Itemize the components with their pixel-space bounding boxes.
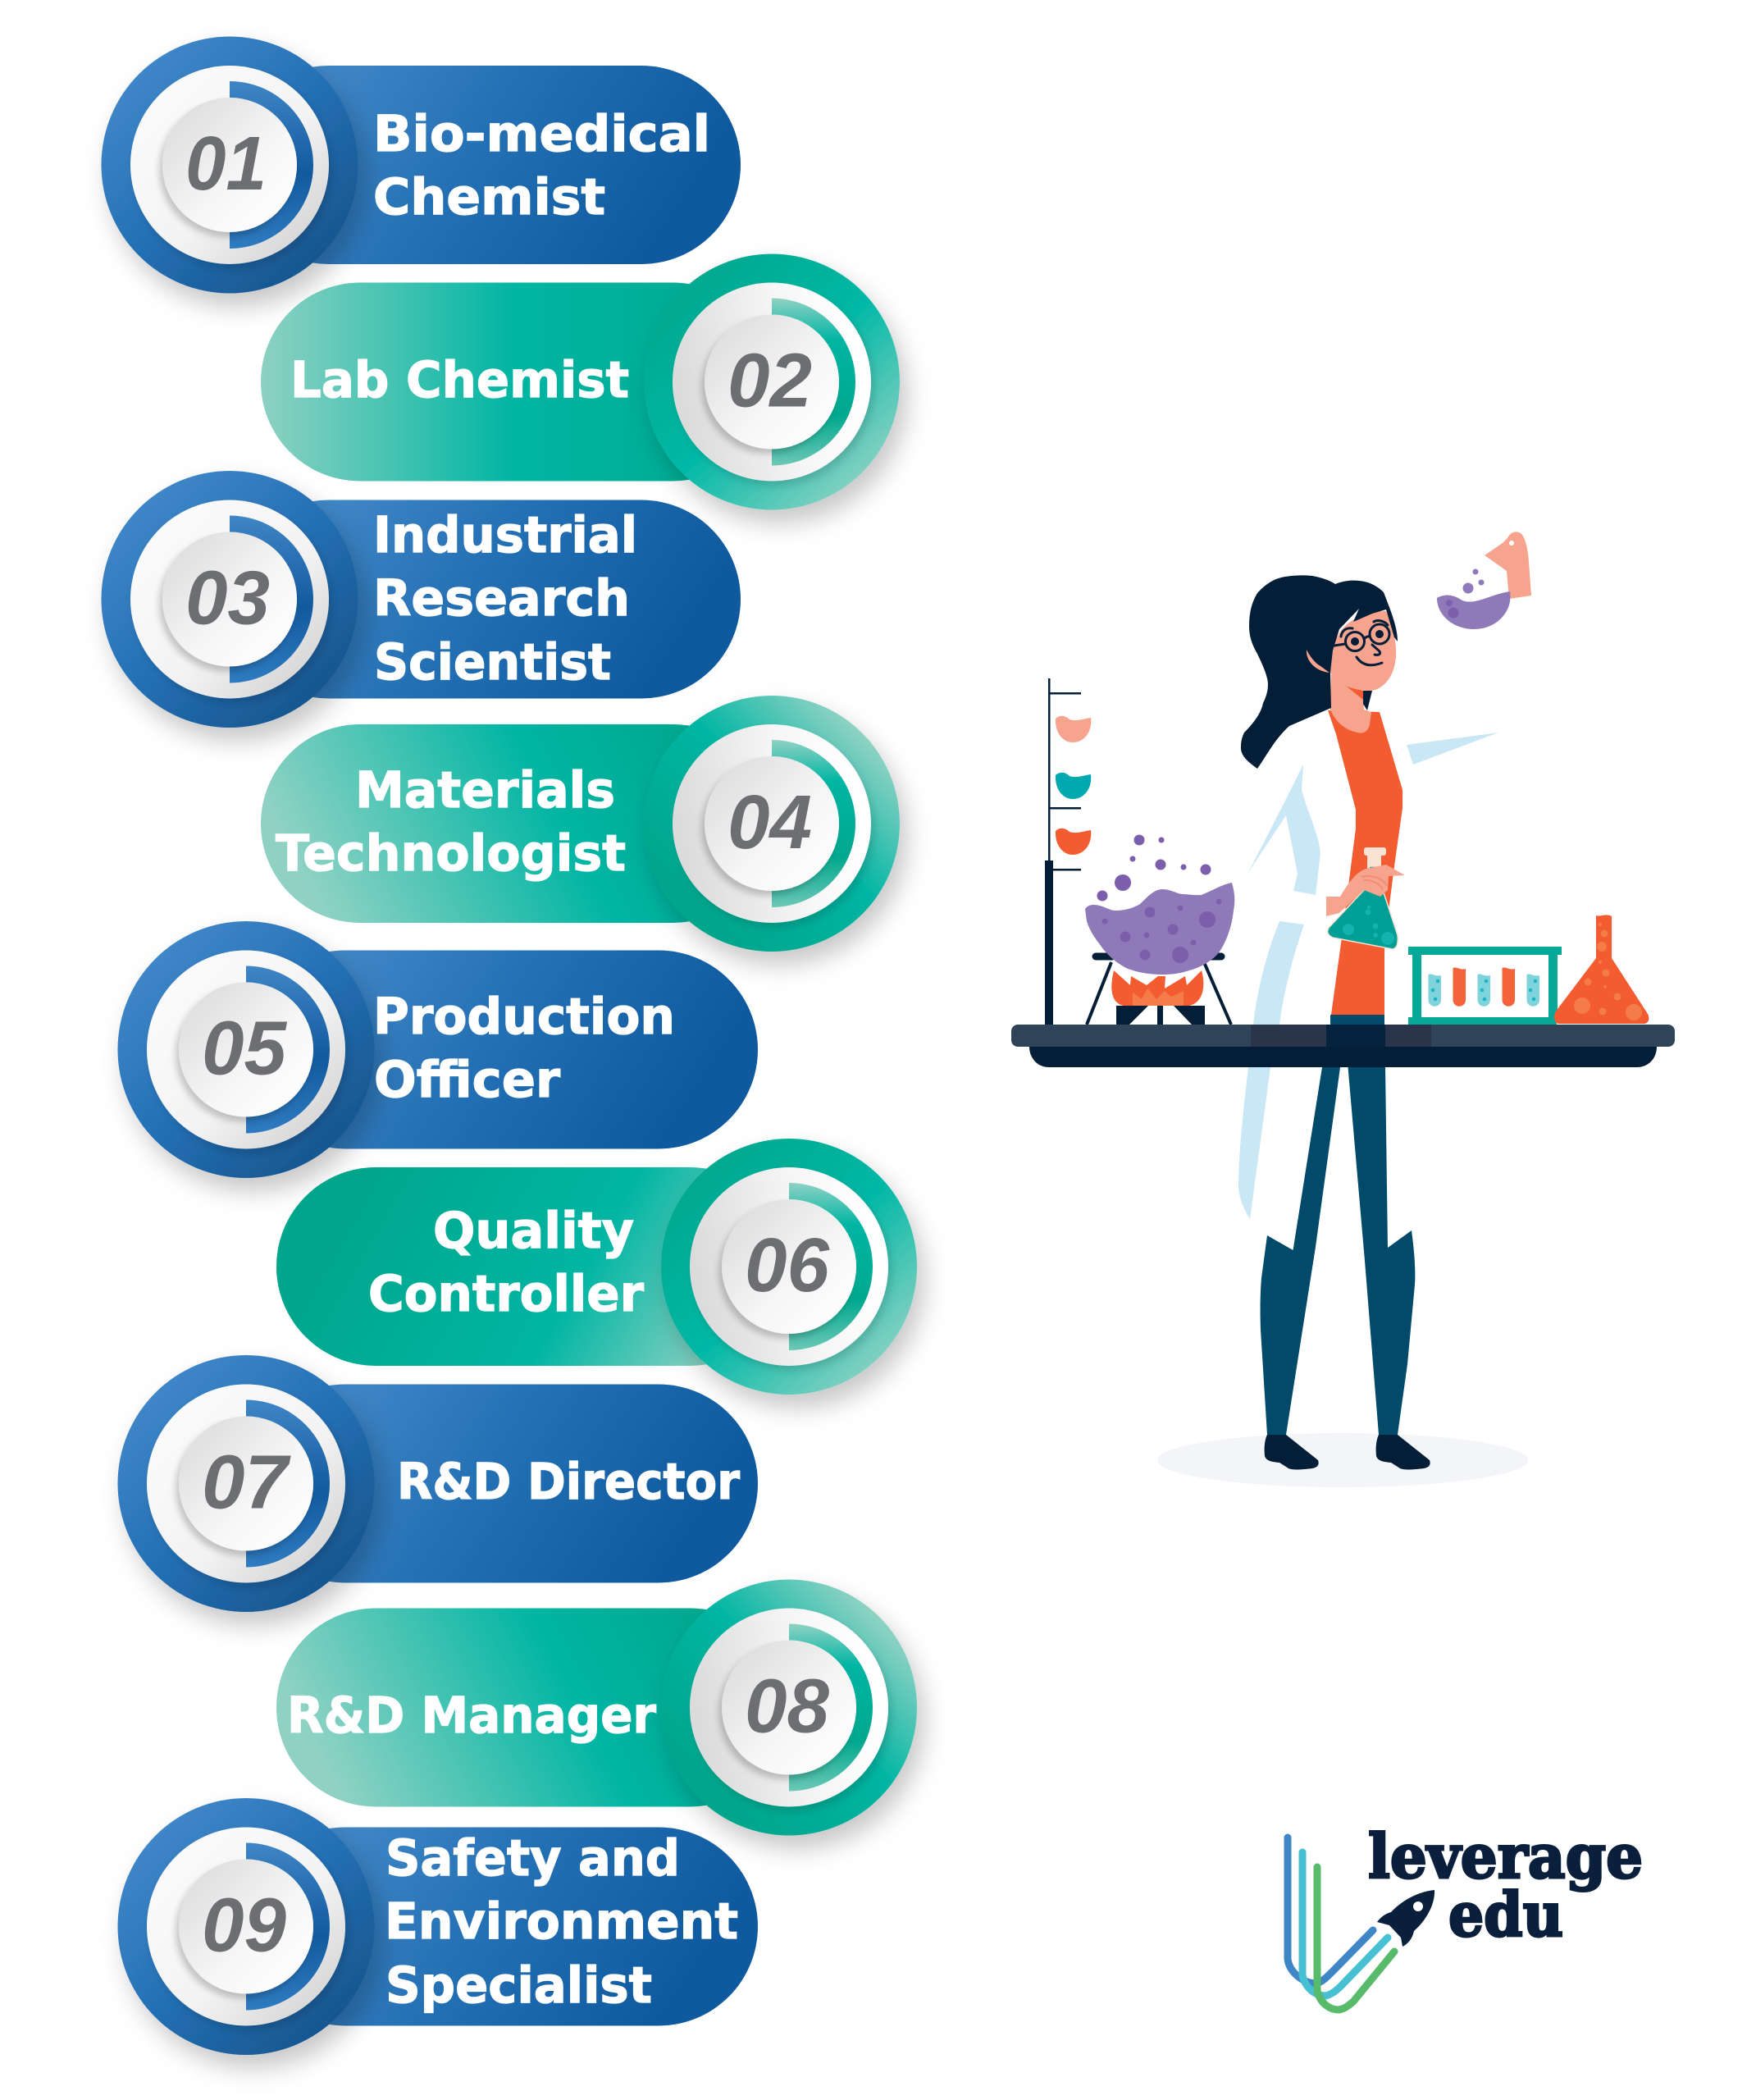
lab table xyxy=(1011,1025,1675,1067)
badge 06: 06 xyxy=(745,1222,830,1308)
pill 06 xyxy=(276,1167,789,1366)
badge 04: 04 xyxy=(727,779,812,865)
badge 08 xyxy=(661,1580,917,1836)
neck xyxy=(1330,674,1371,733)
label 04: Materials xyxy=(355,761,615,819)
badge 01 xyxy=(102,36,358,294)
label 02: Lab Chemist xyxy=(290,351,629,409)
label 09 xyxy=(385,1829,738,2015)
row 08: R&D Manager xyxy=(276,1580,917,1836)
logo: leverage edu xyxy=(1288,1822,1643,2010)
row 06: Quality Controller xyxy=(276,1139,917,1395)
flame xyxy=(1111,970,1203,1006)
label 06 xyxy=(368,1202,644,1323)
row 09: Safety and Environment Specialist xyxy=(118,1798,758,2055)
badge 09: 09 xyxy=(202,1882,286,1967)
shoes xyxy=(1265,1435,1430,1470)
label 01 xyxy=(373,105,710,226)
neck shadow xyxy=(1333,675,1363,700)
coat stripes xyxy=(1238,733,1498,1219)
label 05: Production xyxy=(373,988,675,1046)
label 09: Specialist xyxy=(385,1956,652,2015)
floor shadow xyxy=(1157,1433,1528,1487)
ear xyxy=(1307,650,1330,673)
label 04: Technologist xyxy=(276,824,626,883)
boiling pot xyxy=(1085,835,1234,975)
badge 05 xyxy=(118,921,374,1178)
logo rocket xyxy=(1377,1890,1434,1947)
pill 09 xyxy=(246,1828,758,2026)
hair xyxy=(1241,575,1398,769)
row 01: Bio-medical Chemist xyxy=(102,36,741,294)
label 09: Environment xyxy=(385,1892,738,1951)
pill 08 xyxy=(276,1608,789,1806)
label 08: R&D Manager xyxy=(287,1687,656,1745)
logo wordmark xyxy=(1368,1822,1643,1951)
row 05: Production Officer xyxy=(118,921,758,1178)
burette stand xyxy=(1045,678,1091,1025)
illustration: scientist at lab table xyxy=(1011,532,1675,1487)
badge 09 xyxy=(118,1798,374,2055)
badge 01: 01 xyxy=(185,121,267,206)
logo mark: three stripes xyxy=(1288,1838,1394,2010)
badge 08: 08 xyxy=(745,1664,829,1749)
badge 03: 03 xyxy=(185,555,270,640)
floating flask xyxy=(1437,532,1531,629)
torso xyxy=(1328,710,1403,1015)
test tube rack xyxy=(1408,947,1562,1025)
label 07: R&D Director xyxy=(397,1453,740,1511)
pill 02 xyxy=(261,282,772,481)
row 07: R&D Director xyxy=(118,1355,758,1612)
label 03: Research xyxy=(373,569,630,628)
label 03: Industrial xyxy=(373,506,637,564)
label 01: Chemist xyxy=(373,168,605,226)
badge 03 xyxy=(102,471,358,728)
pill 05 xyxy=(246,950,758,1148)
row 04: Materials Technologist xyxy=(261,696,900,952)
badge 04 xyxy=(644,696,900,952)
held flask and hand xyxy=(1326,847,1405,949)
tripod and burner xyxy=(1087,956,1231,1025)
label 05 xyxy=(373,988,675,1109)
label 06: Controller xyxy=(368,1265,644,1323)
pill 07 xyxy=(246,1385,758,1583)
label 09: Safety and xyxy=(385,1829,680,1888)
face xyxy=(1330,611,1396,691)
glasses and face details xyxy=(1334,621,1389,665)
badge 02 xyxy=(644,254,900,510)
badge 07: 07 xyxy=(202,1439,291,1524)
label 01: Bio-medical xyxy=(373,105,710,163)
orange flask xyxy=(1554,915,1649,1024)
legs xyxy=(1261,1015,1415,1435)
badge 06 xyxy=(661,1139,917,1395)
label 06: Quality xyxy=(433,1202,634,1260)
pill 01 xyxy=(230,66,741,264)
logo wordmark: edu xyxy=(1448,1880,1563,1951)
row 03: Industrial Research Scientist xyxy=(102,471,741,728)
label 04 xyxy=(276,761,626,883)
pill 03 xyxy=(230,500,741,699)
badge 05: 05 xyxy=(202,1006,287,1091)
logo wordmark: leverage xyxy=(1368,1822,1643,1892)
hair strand at neck xyxy=(1363,691,1372,710)
label 03: Scientist xyxy=(374,633,611,692)
label 05: Officer xyxy=(374,1051,560,1109)
label 03 xyxy=(373,506,637,692)
pill 04 xyxy=(261,724,772,923)
badge 02: 02 xyxy=(727,338,812,423)
row 02: Lab Chemist xyxy=(261,254,900,510)
badge 07 xyxy=(118,1355,374,1612)
